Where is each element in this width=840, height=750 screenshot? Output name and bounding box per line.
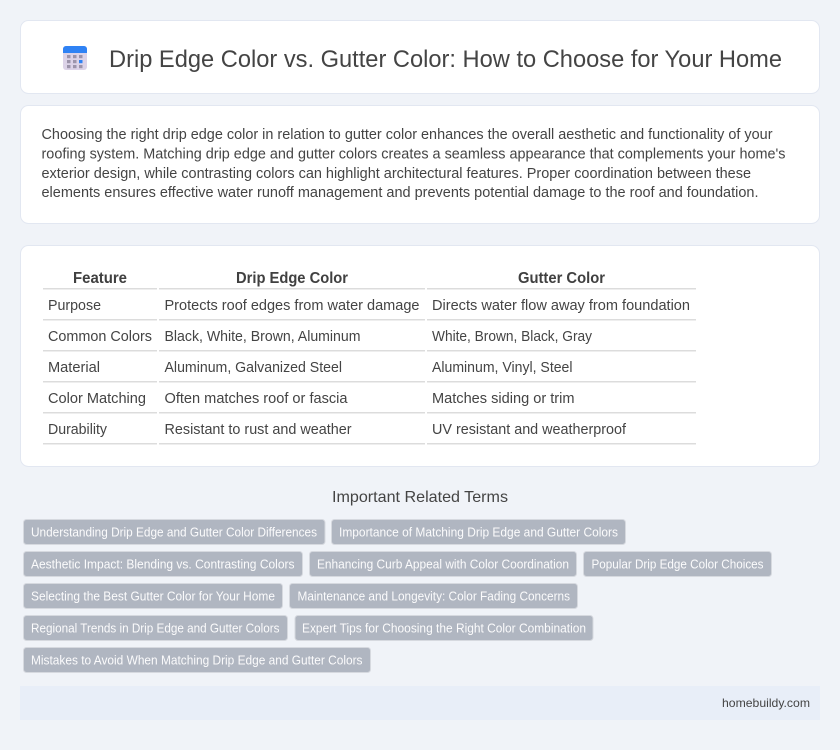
table row: common colors: Common Colors bbox=[48, 329, 152, 345]
table row: material: Aluminum, Vinyl, Steel bbox=[432, 360, 572, 376]
table row: purpose: Directs water flow away from foundation bbox=[432, 298, 690, 314]
tag bbox=[24, 552, 302, 576]
table header row: Gutter Color bbox=[518, 270, 605, 287]
tag: Regional Trends in Drip Edge and Gutter Colors bbox=[31, 620, 280, 636]
footer bbox=[20, 686, 820, 720]
footer source text: homebuildy.com bbox=[722, 696, 810, 710]
table row: purpose bbox=[43, 298, 696, 320]
tag: Mistakes to Avoid When Matching Drip Edge and Gutter Colors bbox=[31, 652, 362, 668]
tag: Popular Drip Edge Color Choices bbox=[592, 556, 764, 572]
tag bbox=[24, 648, 370, 672]
tag: Aesthetic Impact: Blending vs. Contrasting Colors bbox=[31, 556, 294, 572]
text block: introduction paragraph: roofing system. Matching drip edge and gutter colors creates a seamless appearance that complements your home's bbox=[42, 146, 786, 162]
table header row: Feature bbox=[73, 270, 127, 287]
table row: color matching: Color Matching bbox=[48, 391, 146, 407]
tag bbox=[295, 616, 593, 640]
table row: common colors bbox=[43, 329, 696, 352]
heading: important related terms: Important Related Terms bbox=[332, 489, 508, 506]
text block: introduction paragraph bbox=[42, 127, 786, 201]
text block: introduction paragraph: exterior design, while contrasting colors can highlight architectural features. Proper coordination between these bbox=[42, 166, 751, 182]
tag: Understanding Drip Edge and Gutter Color Differences bbox=[31, 524, 317, 540]
table header row: Drip Edge Color bbox=[236, 270, 348, 287]
table row: durability bbox=[43, 422, 696, 444]
table row: color matching bbox=[43, 391, 696, 414]
tag: Expert Tips for Choosing the Right Color Combination bbox=[302, 620, 586, 636]
tag bbox=[310, 552, 576, 576]
tag bbox=[24, 616, 288, 640]
tag group: related terms bbox=[24, 520, 772, 672]
text block: introduction paragraph: Choosing the right drip edge color in relation to gutter color enhances the overall aesthetic and functionality of your bbox=[42, 127, 773, 143]
table row: durability: Resistant to rust and weather bbox=[164, 422, 352, 438]
table row: purpose: Protects roof edges from water damage bbox=[164, 298, 420, 314]
table header row bbox=[43, 270, 696, 290]
table row: color matching: Often matches roof or fascia bbox=[164, 391, 348, 407]
tag: Importance of Matching Drip Edge and Gutter Colors bbox=[339, 524, 618, 540]
table row: material bbox=[43, 360, 696, 382]
tag bbox=[584, 552, 772, 576]
tag bbox=[24, 584, 282, 608]
title: Drip Edge Color vs. Gutter Color: How to Choose for Your Home bbox=[109, 46, 782, 73]
table row: common colors: Black, White, Brown, Aluminum bbox=[164, 329, 361, 345]
tag: Selecting the Best Gutter Color for Your Home bbox=[31, 588, 275, 604]
table row: color matching: Matches siding or trim bbox=[432, 391, 574, 407]
table row: material: Aluminum, Galvanized Steel bbox=[164, 360, 342, 376]
table row: durability: Durability bbox=[48, 422, 108, 438]
tag: Maintenance and Longevity: Color Fading Concerns bbox=[298, 588, 570, 604]
table row: durability: UV resistant and weatherproof bbox=[432, 422, 627, 438]
tag bbox=[332, 520, 626, 544]
table row: material: Material bbox=[48, 360, 100, 376]
text block: introduction paragraph: elements ensures effective water runoff management and prevents potential damage to the roof and foundation. bbox=[42, 185, 758, 201]
tag: Enhancing Curb Appeal with Color Coordination bbox=[317, 556, 569, 572]
icon: calendar bbox=[63, 46, 87, 70]
panel: title header bbox=[20, 20, 820, 94]
table row: common colors: White, Brown, Black, Gray bbox=[432, 329, 593, 345]
tag bbox=[290, 584, 578, 608]
tag bbox=[24, 520, 325, 544]
table row: purpose: Purpose bbox=[48, 298, 101, 314]
panel: comparison table bbox=[20, 246, 820, 466]
panel: introduction bbox=[20, 106, 820, 224]
